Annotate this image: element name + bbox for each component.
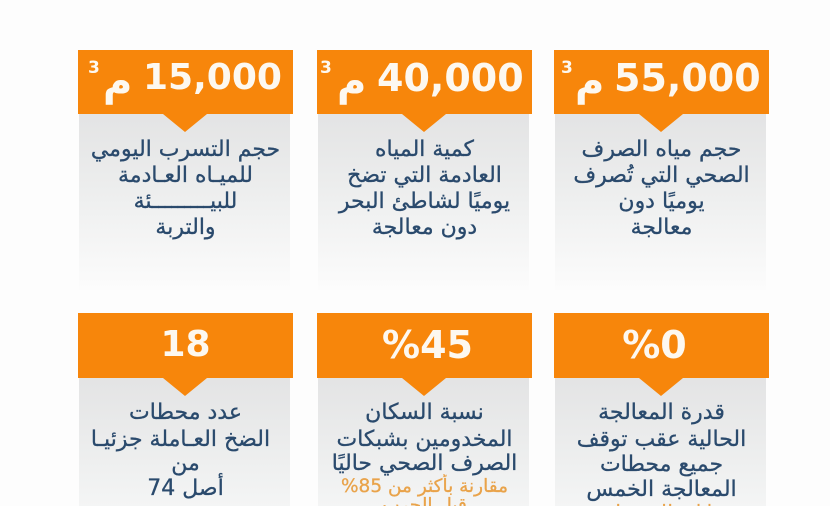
header: 40,000 m3: 3 xyxy=(320,58,332,78)
description: حجم مياه الصرف xyxy=(582,137,741,162)
header: 0%: %0 xyxy=(622,323,687,367)
header: 40,000 m3 xyxy=(317,50,532,114)
description: يوميًا دون xyxy=(618,189,705,214)
panel: wastewater to sea xyxy=(317,50,532,244)
panel: population served xyxy=(317,313,532,506)
header: 40,000 m3: 40,000 xyxy=(377,56,524,100)
description: مقارنة بأكثر من 85% xyxy=(341,476,508,497)
header: 0% xyxy=(554,313,769,378)
description: يوميًا لشاطئ البحر xyxy=(339,189,510,214)
description: المخدومين بشبكات xyxy=(336,427,513,452)
description: العادمة التي تضخ xyxy=(347,163,502,188)
header: 45% xyxy=(317,313,532,378)
description: للبيـــــــــئة xyxy=(134,189,237,214)
description xyxy=(332,400,517,506)
description: الضخ العـاملة جزئيـا xyxy=(91,427,270,452)
header: 18 xyxy=(78,313,293,378)
description: والتربة xyxy=(155,215,216,240)
panel: sewage volume xyxy=(554,50,769,244)
panel: daily leakage xyxy=(78,50,293,244)
header: 40,000 m3: م xyxy=(337,59,366,105)
header: 15,000 m3: 3 xyxy=(88,58,100,78)
header: 18: 18 xyxy=(160,324,211,365)
description: المعالجة الخمس xyxy=(586,477,737,502)
description: الحالية عقب توقف xyxy=(577,427,746,452)
description xyxy=(338,137,510,240)
description: كمية المياه xyxy=(375,137,474,162)
description: أصل 74 xyxy=(147,476,224,501)
description: للميـاه العـادمة xyxy=(118,163,253,188)
description xyxy=(91,137,280,240)
header: 55,000 m3: 55,000 xyxy=(614,56,761,100)
header: 15,000 m3: م xyxy=(103,59,132,105)
description: الصرف الصحي حاليًا xyxy=(332,451,517,476)
panel: treatment capacity xyxy=(554,313,769,506)
description: معالجة xyxy=(631,215,692,240)
header: 15,000 m3 xyxy=(78,50,293,114)
header: 55,000 m3 xyxy=(554,50,769,114)
description: نسبة السكان xyxy=(365,400,484,425)
header: 55,000 m3: 3 xyxy=(561,58,573,78)
description: حجم التسرب اليومي xyxy=(91,137,280,162)
description: قدرة المعالجة xyxy=(598,400,725,425)
description: دون معالجة xyxy=(372,215,477,240)
description xyxy=(577,400,746,506)
description xyxy=(573,137,750,240)
description xyxy=(91,400,270,501)
description: من xyxy=(171,451,200,476)
description: الصحي التي تُصرف xyxy=(573,163,750,188)
header: 55,000 m3: م xyxy=(575,59,604,105)
header: 45%: %45 xyxy=(382,323,473,367)
description: جميع محطات xyxy=(600,452,723,477)
description: عدد محطات xyxy=(129,400,242,425)
header: 15,000 m3: 15,000 xyxy=(143,57,282,98)
panel: pump stations xyxy=(78,313,293,506)
